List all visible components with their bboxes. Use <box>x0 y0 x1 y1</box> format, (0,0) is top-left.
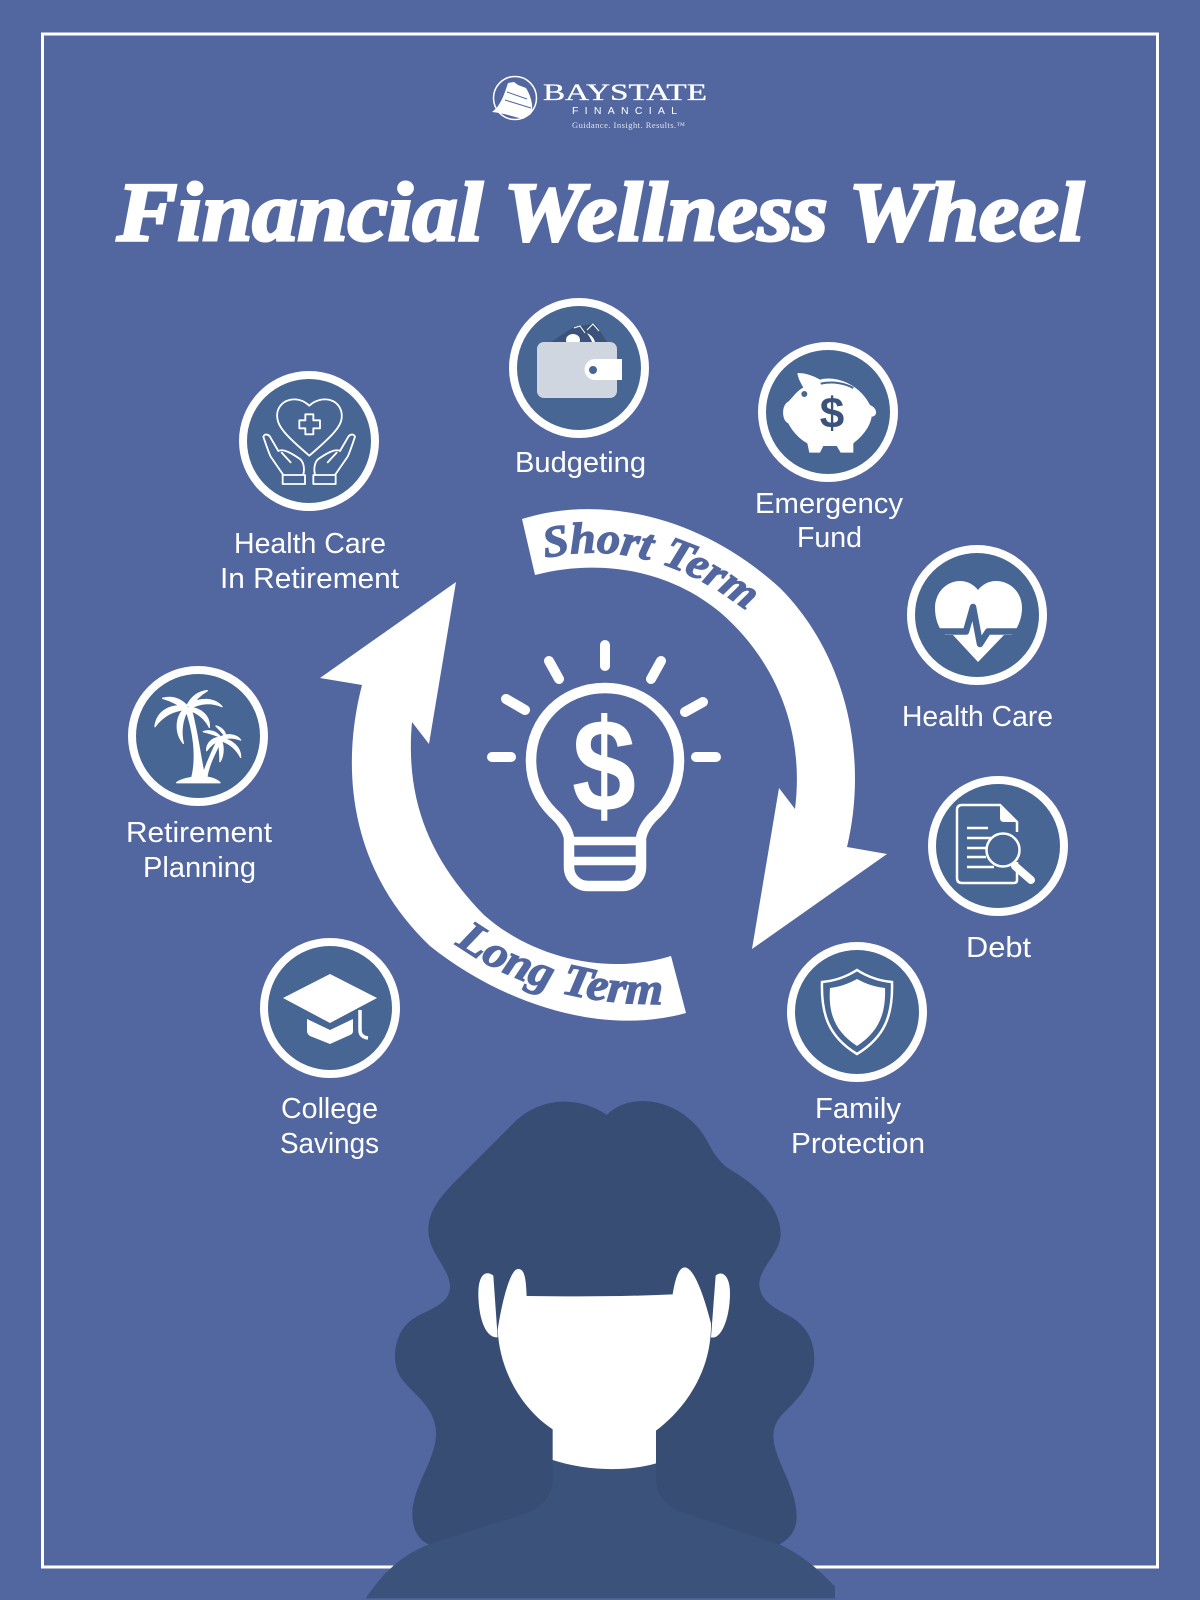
icon: document with magnifier <box>932 780 1064 912</box>
body <box>366 1458 835 1598</box>
panel: budgeting <box>513 302 646 479</box>
icon: piggy bank: $ <box>820 389 844 438</box>
woman silhouette <box>366 1101 835 1598</box>
icon: light bulb with dollar sign: $ <box>572 692 636 839</box>
icon: shield <box>791 946 923 1078</box>
icon: light bulb with dollar sign <box>492 645 716 886</box>
logo: Baystate Financial: FINANCIAL <box>572 105 677 117</box>
title: Financial Wellness Wheel <box>116 166 1085 259</box>
label: family protection: Family <box>815 1093 901 1125</box>
label: retirement planning: Retirement <box>126 817 272 849</box>
label: family protection: Protection <box>791 1128 925 1160</box>
icon: wallet <box>513 302 645 434</box>
icon: heart with pulse <box>911 549 1043 681</box>
panel: health care in retirement <box>220 375 399 595</box>
label: retirement planning <box>126 817 272 884</box>
hair <box>395 1101 814 1545</box>
arrow: long term <box>320 582 686 1021</box>
ears <box>478 1273 730 1338</box>
label: college savings <box>280 1093 379 1160</box>
panel: family protection <box>791 946 925 1160</box>
label: debt: Debt <box>966 932 1031 964</box>
panel: retirement planning <box>126 670 272 884</box>
logo: Baystate Financial: BAYSTATE <box>543 80 707 105</box>
logo: Baystate Financial <box>492 76 707 130</box>
icon: graduation cap <box>264 942 396 1074</box>
panel: health care <box>902 549 1053 733</box>
label: health care in retirement: Health Care <box>234 528 386 560</box>
logo: Baystate Financial: Guidance. Insight. Results.™ <box>572 120 685 130</box>
panel: emergency fund <box>755 346 904 554</box>
panel: college savings <box>264 942 396 1160</box>
panel: debt <box>932 780 1064 964</box>
label: health care in retirement <box>220 528 399 595</box>
icon: palm trees <box>132 670 264 802</box>
label: family protection <box>791 1093 925 1160</box>
label: college savings: College <box>281 1093 378 1125</box>
label: retirement planning: Planning <box>143 852 256 884</box>
icon: piggy bank <box>762 346 894 478</box>
label: emergency fund: Emergency <box>755 488 904 520</box>
label: health care in retirement: In Retirement <box>220 563 399 595</box>
icon: hands holding heart <box>243 375 375 507</box>
label: emergency fund: Fund <box>797 522 862 554</box>
label: emergency fund <box>755 488 904 554</box>
panel: wheel arrows <box>320 509 887 1021</box>
label: health care: Health Care <box>902 701 1053 733</box>
arrow: short term <box>522 509 887 949</box>
arrow: short term: Short Term <box>545 522 756 610</box>
face and neck <box>498 1267 711 1469</box>
label: college savings: Savings <box>280 1128 379 1160</box>
label: budgeting: Budgeting <box>515 447 646 479</box>
arrow: long term: Long Term <box>454 922 662 1005</box>
